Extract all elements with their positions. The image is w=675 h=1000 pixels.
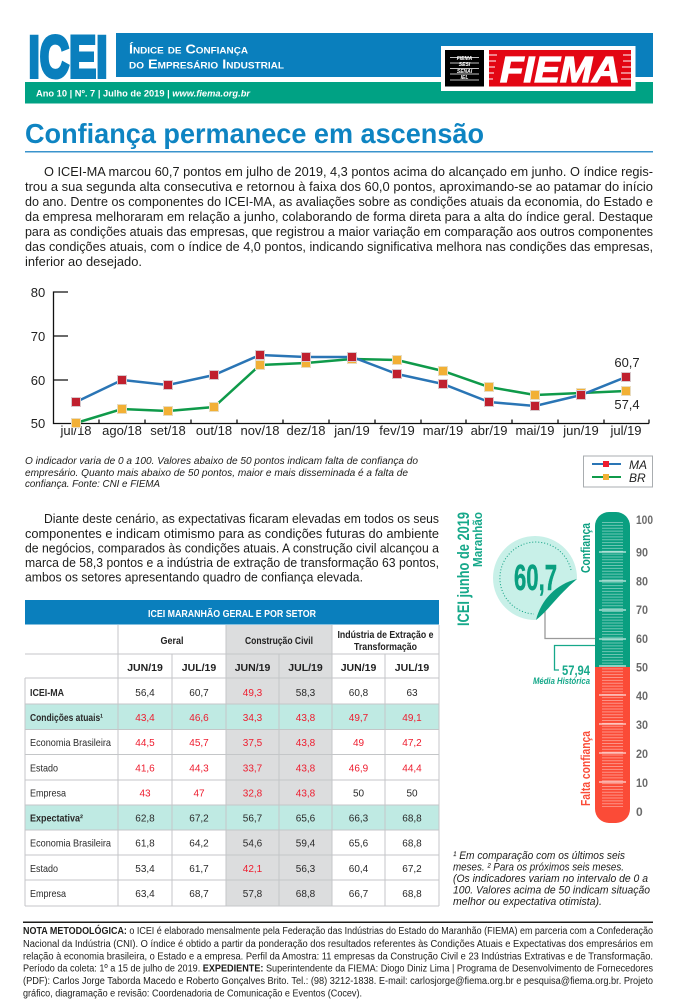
row: Economia Brasileira: 44,5 xyxy=(135,738,155,749)
value labels: 60,7 xyxy=(614,355,640,370)
column headers: Indústria de Extração e xyxy=(338,629,434,641)
y axis labels: 80 xyxy=(31,285,45,300)
table: ICEI Maranhão xyxy=(25,600,439,906)
row: Empresa: 50 xyxy=(353,788,364,800)
footnotes: (Os indicadores variam no intervalo de 0 a xyxy=(453,873,648,885)
series: MA markers xyxy=(72,350,630,410)
row: ICEI-MA xyxy=(30,687,418,699)
x axis labels: nov/18 xyxy=(240,423,280,438)
x axis labels: jan/19 xyxy=(333,423,370,438)
intro paragraph: das condições atuais, com o índice de 4,0 pontos, indicando significativa melhora nas condições das empresas, xyxy=(25,239,653,254)
column headers: Construção Civil xyxy=(245,635,313,647)
row: Empresa expectativa: 68,8 xyxy=(296,889,316,900)
chart note: O indicador varia de 0 a 100. Valores abaixo de 50 pontos indicam falta de confiança do xyxy=(25,455,418,467)
row: Expectativa xyxy=(30,812,422,824)
logo: FIEMA: SESI xyxy=(459,62,471,68)
label: Falta confiança: Falta confiança xyxy=(579,730,593,806)
logo: FIEMA: IEL xyxy=(461,75,468,81)
intro paragraph: trou a sua segunda alta consecutiva e retornou à faixa dos 60,0 pontos, aproximando-se ao patamar do início xyxy=(25,179,653,194)
row: Empresa expectativa: 66,7 xyxy=(349,889,369,900)
y axis labels xyxy=(31,285,45,431)
row: Expectativa: 62,8 xyxy=(135,814,155,824)
series: BR line xyxy=(76,359,626,423)
column headers: JUL/19 xyxy=(182,662,216,674)
value labels xyxy=(614,355,640,412)
second paragraph: Diante deste cenário, as expectativas ficaram elevadas em todos os seus xyxy=(44,511,439,526)
scale labels: 90 xyxy=(636,546,648,560)
chart note: confiança. Fonte: CNI e FIEMA xyxy=(25,478,160,490)
row: Estado: 44,4 xyxy=(402,764,422,774)
x axis labels: fev/19 xyxy=(379,423,415,438)
x axis labels: dez/18 xyxy=(286,423,326,438)
column headers: JUN/19 xyxy=(127,662,163,674)
second paragraph: marca de 58,3 pontos e a indústria de extração de transformação 63 pontos, xyxy=(25,555,439,570)
publication name: do Empresário Industrial xyxy=(129,56,285,72)
row: ICEI-MA: 56,4 xyxy=(135,688,155,699)
x axis labels: ago/18 xyxy=(102,423,142,438)
legend xyxy=(584,456,652,487)
scale labels: 50 xyxy=(636,660,648,674)
row: Condições atuais: Condições atuais¹ xyxy=(30,712,103,724)
header banner xyxy=(25,25,653,104)
row: Economia Brasileira: 49 xyxy=(353,738,364,749)
scale labels xyxy=(636,513,653,819)
title: Confiança permanece em ascensão xyxy=(25,118,484,149)
scale labels: 40 xyxy=(636,689,648,703)
column headers: Geral xyxy=(160,635,184,647)
x axis labels: jul/19 xyxy=(609,423,642,438)
row: Estado: Estado xyxy=(30,762,58,774)
historical mean value xyxy=(533,663,590,686)
row: Estado expectativa: 60,4 xyxy=(349,864,369,875)
footnotes: melhor ou expectativa otimista). xyxy=(453,896,602,908)
table title xyxy=(25,600,439,624)
row: Empresa expectativa: 63,4 xyxy=(135,889,155,900)
row: Economia Brasileira: 45,7 xyxy=(189,738,209,749)
side heading xyxy=(454,512,485,626)
series: BR markers xyxy=(72,354,630,428)
row: Empresa: 43,8 xyxy=(296,788,316,800)
intro paragraph: para as condições atuais das empresas, que registrou a maior variação em comparação aos outros componentes xyxy=(25,224,653,239)
row: Condições atuais: 43,4 xyxy=(135,713,155,724)
side heading: Maranhão xyxy=(471,512,485,567)
row: Empresa: Empresa xyxy=(30,788,66,800)
row: Economia Brasileira expectativa: 61,8 xyxy=(135,838,155,850)
row: Expectativa: Expectativa² xyxy=(30,812,83,824)
row: Estado expectativa xyxy=(30,863,422,875)
row: Estado expectativa: 53,4 xyxy=(135,864,155,875)
row: Condições atuais: 43,8 xyxy=(296,713,316,724)
thermometer graphic xyxy=(454,512,653,823)
column headers xyxy=(127,629,434,674)
row: Empresa xyxy=(30,788,418,800)
row: Economia Brasileira expectativa: 59,4 xyxy=(296,838,316,850)
legend: BR xyxy=(629,471,646,485)
row: Expectativa: 56,7 xyxy=(243,814,263,824)
x axis labels: jun/19 xyxy=(562,423,599,438)
x axis labels: set/18 xyxy=(150,423,186,438)
logo: FIEMA xyxy=(441,46,636,91)
y axis labels: 50 xyxy=(31,416,45,431)
series: MA line xyxy=(76,355,626,406)
edition info: Ano 10 | Nº. 7 | Julho de 2019 | www.fiema.org.br xyxy=(36,88,251,100)
row: Estado: 44,3 xyxy=(189,764,209,774)
connector: current value xyxy=(545,610,600,638)
row: Economia Brasileira expectativa: 54,6 xyxy=(243,838,263,850)
scale labels: 60 xyxy=(636,632,648,646)
scale labels: 70 xyxy=(636,603,648,617)
methodology note: gráfico, diagramação e revisão: Coordenadoria de Comunicação e Eventos (Cocev). xyxy=(23,988,362,1000)
row: Economia Brasileira expectativa xyxy=(30,838,422,850)
row: Condições atuais: 34,3 xyxy=(243,713,263,724)
row: ICEI-MA: ICEI-MA xyxy=(30,687,64,699)
badge: 60,7 xyxy=(493,536,577,620)
legend: MA xyxy=(629,458,647,472)
intro paragraph: O ICEI-MA marcou 60,7 pontos em julho de 2019, 4,3 pontos acima do alcançado em junho. O índice regis- xyxy=(44,164,653,179)
row: Economia Brasileira expectativa: Economia Brasileira xyxy=(30,838,111,850)
y axis labels: 70 xyxy=(31,329,45,344)
column headers: JUL/19 xyxy=(395,662,429,674)
second paragraph xyxy=(25,511,440,584)
x axis labels xyxy=(59,423,642,438)
x axis labels: mai/19 xyxy=(515,423,555,438)
footnotes: ¹ Em comparação com os últimos seis xyxy=(453,850,625,862)
column headers: Transformação xyxy=(354,641,417,653)
column headers: JUL/19 xyxy=(288,662,323,674)
y axis labels: 60 xyxy=(31,373,45,388)
row: Expectativa: 66,3 xyxy=(349,814,369,824)
row: Economia Brasileira expectativa: 64,2 xyxy=(189,838,209,850)
row: ICEI-MA: 60,7 xyxy=(189,688,209,699)
chart note: empresário. Quanto mais abaixo de 50 pontos, maior e mais disseminada é a falta de xyxy=(25,467,408,479)
line chart: MA vs BR xyxy=(31,285,649,438)
row: Estado expectativa: 67,2 xyxy=(402,864,422,875)
row: Estado expectativa: Estado xyxy=(30,863,58,875)
row: Condições atuais: 49,1 xyxy=(402,713,422,724)
scale labels: 80 xyxy=(636,574,648,588)
column headers: JUN/19 xyxy=(235,662,270,674)
methodology note: Período da coleta: 1º a 15 de julho de 2019. EXPEDIENTE: Superintendente da FIEMA: Diogo Diniz Lima | Programa de Desenvolvimento de Fornecedores xyxy=(23,964,653,974)
publication name: Índice de Confiança xyxy=(129,42,249,56)
x axis labels: jul/18 xyxy=(59,423,92,438)
footnotes: 100. Valores acima de 50 indicam situação xyxy=(453,884,650,896)
logo: FIEMA: SENAI xyxy=(457,69,473,75)
label: Confiança: Confiança xyxy=(579,522,593,573)
badge: 60,7: 60,7 xyxy=(514,557,557,598)
row: ICEI-MA: 58,3 xyxy=(296,688,316,699)
methodology note xyxy=(23,922,653,1000)
thermometer body xyxy=(595,512,630,823)
row: Estado: 33,7 xyxy=(243,764,263,774)
row: Empresa: 32,8 xyxy=(243,788,263,800)
intro paragraph xyxy=(25,164,653,269)
row: Empresa expectativa: 68,8 xyxy=(402,889,422,900)
x axis labels: abr/19 xyxy=(471,423,507,438)
row: Estado: 43,8 xyxy=(296,764,316,774)
historical mean value: Média Histórica xyxy=(533,676,590,686)
second paragraph: de negócios, comparados às condições atuais. A construção civil alcançou a xyxy=(25,540,440,556)
publication name xyxy=(129,42,285,72)
table: ICEI Maranhão: ICEI MARANHÃO GERAL E POR SETOR xyxy=(148,607,316,620)
chart note xyxy=(25,455,418,490)
scale labels: 0 xyxy=(636,805,643,819)
side heading: ICEI junho de 2019 xyxy=(454,512,473,626)
second paragraph: componentes e indicam otimismo para as condições futuras do ambiente xyxy=(25,526,439,541)
table backgrounds xyxy=(25,625,439,906)
row: Expectativa: 68,8 xyxy=(402,814,422,824)
row: Economia Brasileira: 47,2 xyxy=(402,738,422,749)
x axis labels: mar/19 xyxy=(423,423,463,438)
scale labels: 20 xyxy=(636,747,648,761)
row: ICEI-MA: 63 xyxy=(406,688,418,699)
row: Economia Brasileira expectativa: 65,6 xyxy=(349,838,369,850)
footnotes xyxy=(453,850,650,908)
ICEI wordmark: ICEI xyxy=(28,25,108,90)
row: Estado xyxy=(30,762,422,774)
row: Economia Brasileira: Economia Brasileira xyxy=(30,737,111,749)
row: Estado expectativa: 61,7 xyxy=(189,864,209,875)
row: Empresa: 47 xyxy=(193,788,205,800)
connector: historical mean xyxy=(554,646,600,670)
axes xyxy=(54,292,649,424)
x axis labels: out/18 xyxy=(196,423,232,438)
value labels: 57,4 xyxy=(614,397,640,412)
scale labels: 30 xyxy=(636,718,648,732)
green edition bar xyxy=(25,82,653,104)
intro paragraph: inferior ao desejado. xyxy=(25,254,142,269)
row: Estado expectativa: 56,3 xyxy=(296,864,316,875)
row: Empresa expectativa: Empresa xyxy=(30,888,66,900)
scale labels: 10 xyxy=(636,776,648,790)
row: Estado: 41,6 xyxy=(135,764,155,774)
row: Estado: 46,9 xyxy=(349,764,369,774)
row: Condições atuais xyxy=(30,712,422,724)
row: Economia Brasileira expectativa: 68,8 xyxy=(402,838,422,850)
row: Condições atuais: 46,6 xyxy=(189,713,209,724)
historical mean value: 57,94 xyxy=(562,663,590,678)
intro paragraph: da empresa melhoraram em relação a junho, colaborando de forma direta para a alta do índice geral. Destaque xyxy=(25,209,653,224)
second paragraph: ambos os setores apresentando quadro de confiança elevada. xyxy=(25,570,363,584)
row: Empresa expectativa: 68,7 xyxy=(189,889,209,900)
row: Condições atuais: 49,7 xyxy=(349,713,369,724)
scale labels: 100 xyxy=(636,513,653,527)
grid xyxy=(25,625,439,906)
row: Empresa expectativa: 57,8 xyxy=(243,889,263,900)
row: Empresa: 43 xyxy=(139,788,151,800)
row: Expectativa: 67,2 xyxy=(189,814,209,824)
row: Economia Brasileira xyxy=(30,737,422,749)
row: ICEI-MA: 49,3 xyxy=(243,688,263,699)
row: Expectativa: 65,6 xyxy=(296,814,316,824)
intro paragraph: do ano. Dentre os componentes do ICEI-MA, as avaliações sobre as condições atuais da economia, do Estado e xyxy=(25,194,653,209)
row: Estado expectativa: 42,1 xyxy=(243,864,263,875)
footnotes: meses. ² Para os próximos seis meses. xyxy=(453,862,624,874)
row: Economia Brasileira: 37,5 xyxy=(243,738,263,749)
logo: FIEMA: FIEMA xyxy=(500,49,620,90)
row: Empresa: 50 xyxy=(406,788,418,800)
row: ICEI-MA: 60,8 xyxy=(349,688,369,699)
row: Empresa expectativa xyxy=(30,888,422,900)
column headers: JUN/19 xyxy=(341,662,376,674)
logo: FIEMA: FIEMA xyxy=(457,56,473,62)
row: Economia Brasileira: 43,8 xyxy=(296,738,316,749)
blue title bar xyxy=(116,33,653,77)
